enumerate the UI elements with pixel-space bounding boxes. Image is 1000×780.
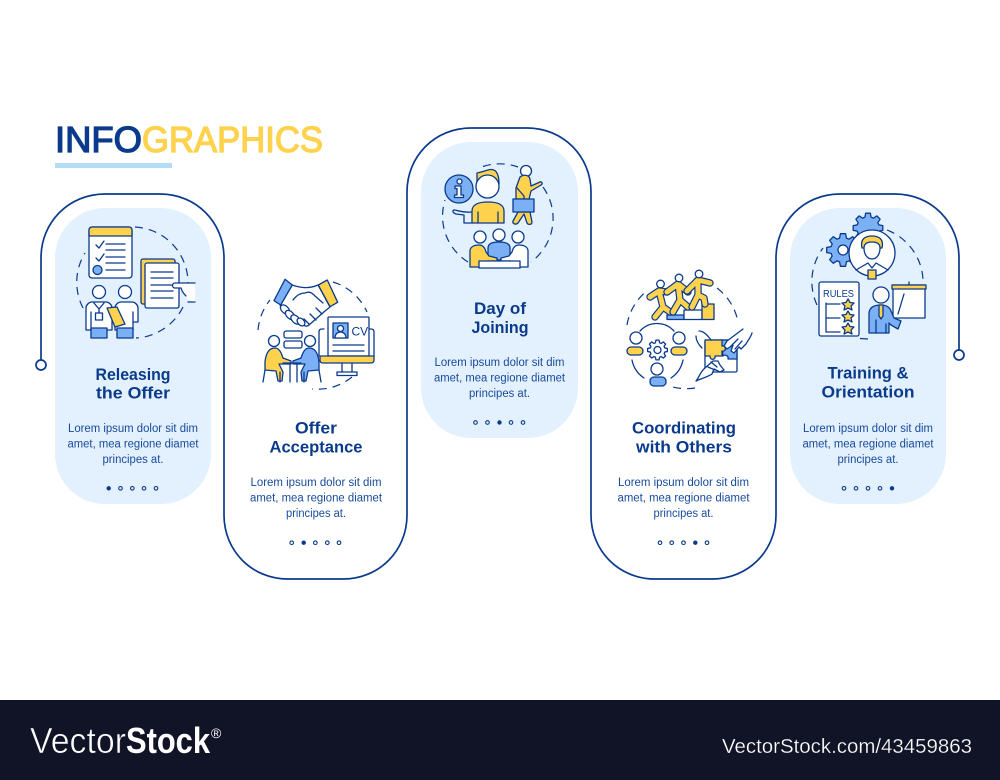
icon: teamwork <box>627 270 752 389</box>
body text: Lorem ipsum dolor sit dim <box>434 357 564 369</box>
heading: Joining <box>472 318 528 337</box>
body text: Lorem ipsum dolor sit dim <box>803 423 933 435</box>
heading: Orientation <box>822 382 914 402</box>
logo: VectorStock: Vector <box>30 720 126 761</box>
heading <box>632 418 736 456</box>
icon: training <box>812 213 926 339</box>
body text: Lorem ipsum dolor sit dim <box>68 423 198 435</box>
body text <box>802 423 934 466</box>
heading: Offer <box>295 418 337 437</box>
body text <box>434 357 566 400</box>
body text: Lorem ipsum dolor sit dim <box>618 477 749 489</box>
body text <box>250 477 383 520</box>
pagination dots <box>842 486 894 490</box>
pagination dots <box>474 420 525 425</box>
pagination dots <box>658 540 709 545</box>
icon: training: RULES <box>823 289 854 300</box>
logo: VectorStock: ® <box>211 725 222 741</box>
heading: with Others <box>635 437 732 456</box>
footer band <box>0 700 1000 780</box>
title: INFOGRAPHICS <box>55 119 323 168</box>
logo: VectorStock <box>30 720 222 761</box>
icon: checklist and offer <box>77 227 195 338</box>
image id: VectorStock.com/43459863 <box>722 736 972 758</box>
body text: amet, mea regione diamet <box>434 372 566 384</box>
heading <box>270 418 362 456</box>
pagination dots <box>290 540 341 545</box>
body text: amet, mea regione diamet <box>802 438 934 450</box>
heading <box>472 299 528 337</box>
panel: coordinating with others <box>618 270 752 545</box>
heading: Day of <box>474 299 526 318</box>
body text: amet, mea regione diamet <box>68 438 199 450</box>
heading: Coordinating <box>632 418 736 437</box>
logo: VectorStock: Stock <box>126 720 211 761</box>
heading <box>822 364 914 402</box>
title: INFOGRAPHICS: INFO <box>55 119 142 160</box>
heading: Acceptance <box>270 437 362 456</box>
body text: principes at. <box>469 388 530 400</box>
pagination dots <box>106 486 158 490</box>
heading: the Offer <box>96 384 170 402</box>
icon: handshake and CV <box>258 279 374 389</box>
connecting outline <box>36 128 964 579</box>
body text: principes at. <box>838 454 898 466</box>
body text: principes at. <box>102 454 164 466</box>
panel: day of joining <box>421 142 578 438</box>
title: INFOGRAPHICS: GRAPHICS <box>142 119 323 160</box>
icon: new employee and team <box>443 164 553 268</box>
icon: handshake and CV: CV <box>352 324 368 338</box>
body text: principes at. <box>286 508 346 520</box>
panel: offer acceptance <box>250 279 383 545</box>
body text: Lorem ipsum dolor sit dim <box>250 477 382 489</box>
heading <box>96 365 170 402</box>
body text <box>618 477 750 520</box>
panel: releasing the offer <box>55 208 211 504</box>
body text: amet, mea regione diamet <box>618 493 750 505</box>
panel: training and orientation <box>790 208 946 504</box>
body text: principes at. <box>654 508 714 520</box>
body text <box>68 423 199 466</box>
body text: amet, mea regione diamet <box>250 493 383 505</box>
heading: Releasing <box>96 365 170 384</box>
heading: Training & <box>828 364 908 382</box>
